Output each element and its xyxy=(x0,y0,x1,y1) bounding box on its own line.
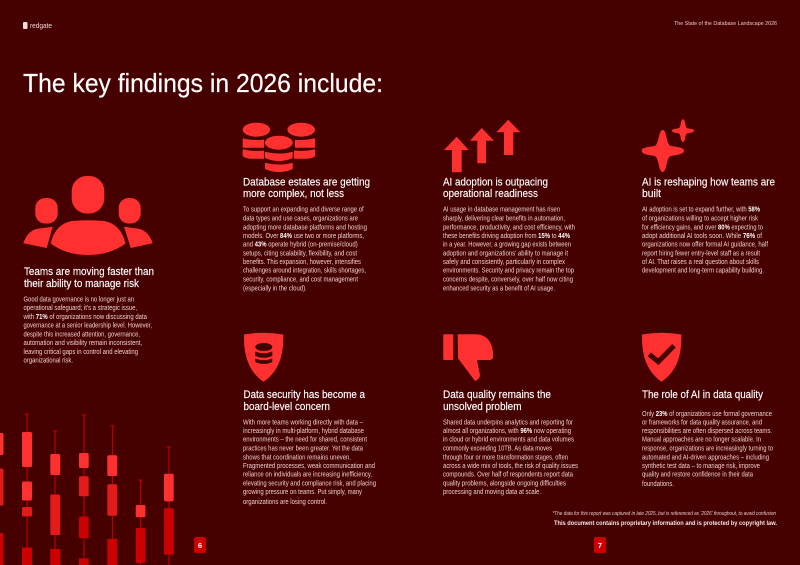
body text: of organizations willing to accept higher risk xyxy=(642,216,758,223)
heading xyxy=(24,266,154,290)
page number 6: 6 xyxy=(198,541,202,550)
panel: teams moving faster xyxy=(23,176,154,365)
body text: concerns despite, conversely, over half now citing xyxy=(443,277,573,284)
heading xyxy=(244,389,366,413)
body text: organizations now offer formal AI guidance, half xyxy=(642,241,768,248)
body text: data types and use cases, organizations are xyxy=(243,216,358,223)
heading: AI adoption is outpacing xyxy=(443,176,548,188)
report header: The State of the Database Landscape 2026 xyxy=(674,21,777,27)
body text xyxy=(23,296,152,365)
body text: these benefits driving adoption from 15% to 44% xyxy=(443,233,571,240)
body text: adopting more database platforms and hosting xyxy=(243,224,367,231)
heading xyxy=(642,176,775,200)
body text: Manual approaches are no longer scalable. In xyxy=(642,437,761,444)
body text: leaving critical gaps in control and elevating xyxy=(24,349,138,356)
body text: processing and moving data at scale. xyxy=(443,489,541,496)
body text: challenges around integration, skills shortages, xyxy=(243,268,366,275)
body text: benefits. This expansion, however, intensifies xyxy=(243,259,361,266)
body text: (especially in the cloud). xyxy=(243,286,307,293)
body text: quality problems, alongside ongoing difficulties xyxy=(443,480,566,487)
heading: The role of AI in data quality xyxy=(642,389,763,401)
logo: redgate xyxy=(23,21,52,30)
body text: foundations. xyxy=(642,481,674,488)
body text xyxy=(243,419,376,506)
body text: for efficiency gains, and over 80% expecting to xyxy=(642,224,763,231)
heading: Teams are moving faster than xyxy=(24,266,154,278)
body text: compounds. Over half of respondents report data xyxy=(443,472,573,479)
icon: sparkles xyxy=(642,119,694,172)
heading: operational readiness xyxy=(443,188,538,200)
panel: AI reshaping teams xyxy=(642,119,775,275)
body text xyxy=(642,207,768,275)
body text: Shared data underpins analytics and reporting for xyxy=(443,419,574,426)
panel: data quality xyxy=(443,334,578,496)
heading: board-level concern xyxy=(244,401,330,413)
body text: automated and AI-driven approaches – including xyxy=(642,454,769,461)
page number 7: 7 xyxy=(598,541,602,550)
body text: across a wide mix of tools, the risk of quality issues xyxy=(443,463,578,470)
body text: organizations are losing control. xyxy=(243,499,327,506)
body text xyxy=(642,411,773,488)
body text: sharply, delivering clear benefits in automation, xyxy=(443,216,565,223)
heading: Database estates are getting xyxy=(243,176,370,188)
body text: automation and visibility remain inconsistent, xyxy=(24,340,142,347)
body text: Good data governance is no longer just an xyxy=(24,296,134,303)
heading: Data quality remains the xyxy=(443,389,551,401)
body text: setups, citing scalability, flexibility, and cost xyxy=(243,250,357,257)
logo: redgate: redgate xyxy=(30,21,52,30)
page number 7 xyxy=(594,537,606,553)
body text: To support an expanding and diverse range of xyxy=(243,207,364,214)
body text: Fragmented processes, weak communication and xyxy=(243,463,375,470)
body text: AI usage in database management has risen xyxy=(443,207,560,214)
body text: practices has never been greater. Yet the data xyxy=(243,446,363,453)
body text: security, compliance, and cost management xyxy=(243,277,358,284)
body text: almost all organizations, with 96% now operating xyxy=(443,428,571,435)
body text: and 43% operate hybrid (on-premise/cloud) xyxy=(243,241,358,248)
body text: environments – the need for shared, consistent xyxy=(243,437,367,444)
body text: environments. Security and privacy remain the top xyxy=(443,268,574,275)
body text: in a year. However, a growing gap exists between xyxy=(443,241,571,248)
icon: database stacks xyxy=(243,123,315,172)
body text: adopt additional AI tools soon. While 76% of xyxy=(642,233,762,240)
body text: report hiring fewer entry-level staff as a result xyxy=(642,250,760,257)
body text: adoption and organizations’ ability to manage it xyxy=(443,250,568,257)
heading xyxy=(243,176,370,200)
body text: synthetic test data – to manage risk, improve xyxy=(642,463,760,470)
panel: data security xyxy=(243,333,376,506)
body text: development and long-term capability building. xyxy=(642,268,764,275)
panel: database estates xyxy=(243,123,370,293)
body text: or frameworks for data quality assurance, and xyxy=(642,419,762,426)
body text: growing pressure on teams. Put simply, many xyxy=(243,489,362,496)
body text: response, organizations are increasingly turning to xyxy=(642,446,773,453)
icon: team of people xyxy=(23,176,153,255)
body text: safely and consistently, particularly in complex xyxy=(443,259,565,266)
body text: shows that coordination remains uneven. xyxy=(243,454,351,461)
panel: AI adoption xyxy=(443,120,575,293)
body text xyxy=(443,419,578,496)
body text: With more teams working directly with data – xyxy=(243,419,363,426)
body text: AI adoption is set to expand further, with 58% xyxy=(642,207,761,214)
panel: AI in data quality xyxy=(642,333,773,488)
body text: through four or more transformation stages, often xyxy=(443,454,568,461)
body text: elevating security and compliance risk, and placing xyxy=(243,480,376,487)
heading xyxy=(443,176,548,200)
body text: increasingly in multi-platform, hybrid database xyxy=(243,428,364,435)
body text: governance at a senior leadership level. However, xyxy=(24,323,152,330)
body text xyxy=(243,207,367,293)
body text: with 71% of organizations now discussing data xyxy=(23,314,147,321)
body text: quality and restore confidence in their data xyxy=(642,472,753,479)
icon: rising arrows xyxy=(444,120,520,172)
title: The key findings in 2026 include: xyxy=(23,68,383,98)
heading: AI is reshaping how teams are xyxy=(642,176,775,188)
icon: shield with database xyxy=(244,333,283,382)
heading: more complex, not less xyxy=(243,188,344,200)
icon: thumbs down xyxy=(443,334,493,381)
body text: responsibilities are often dispersed across teams. xyxy=(642,428,772,435)
body text: enhanced security as a benefit of AI usage. xyxy=(443,286,555,293)
body text: Only 23% of organizations use formal governance xyxy=(642,411,772,418)
heading xyxy=(443,389,551,413)
body text: operational safeguard; it’s a strategic issue, xyxy=(24,305,137,312)
chart: decorative candlesticks xyxy=(0,414,174,565)
heading: built xyxy=(642,188,662,200)
heading: unsolved problem xyxy=(443,401,522,413)
body text: despite this increased attention, governance, xyxy=(24,331,140,338)
body text: in cloud or hybrid environments and data volumes xyxy=(443,437,574,444)
body text: commonly exceeding 10TB. As data moves xyxy=(443,446,552,453)
icon: shield with check xyxy=(642,333,681,382)
body text: performance, productivity, and cost efficiency, with xyxy=(443,224,575,231)
body text: of AI. That raises a real question about skills xyxy=(642,259,759,266)
page number 6 xyxy=(194,537,206,553)
body text: organizational risk. xyxy=(24,358,73,365)
heading: Data security has become a xyxy=(244,389,366,401)
body text: reliance on individuals are increasing inefficiency, xyxy=(243,472,372,479)
body text: models. Over 84% use two or more platforms, xyxy=(243,233,364,240)
heading: their ability to manage risk xyxy=(24,278,139,290)
body text xyxy=(443,207,575,293)
